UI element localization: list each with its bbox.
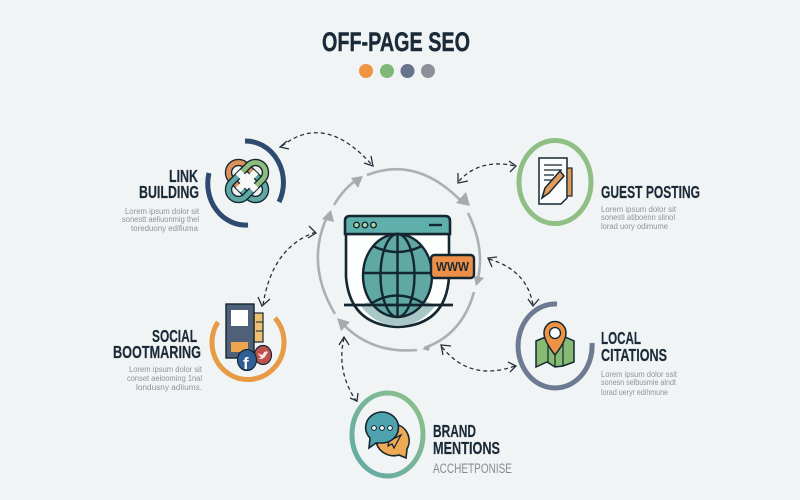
brand ring: [352, 393, 423, 476]
description: sonesti atiboenn slinol: [601, 213, 675, 222]
icon: bookmark device: [226, 304, 263, 358]
icon: orange speech bubble: [376, 424, 409, 458]
heading: GUEST POSTING: [601, 182, 700, 202]
icon: side pen: [567, 168, 572, 196]
pin hole: [550, 328, 560, 338]
window buttons: [354, 222, 376, 228]
icon: pencil: [542, 171, 564, 198]
heading: LOCAL: [601, 328, 641, 348]
central cycle ring: [318, 169, 484, 351]
description: Lorem ipsum dolor sit: [125, 207, 200, 216]
icon: document: [539, 158, 567, 204]
heading: [139, 166, 199, 202]
panel: link building: [122, 141, 283, 233]
dashed arrow: social to center: [258, 226, 316, 306]
window body: [346, 234, 449, 327]
description: sonestt aeliuonmig thel: [122, 215, 199, 224]
heading: BOOTMARING: [113, 342, 201, 362]
description: Lorem ipsum dolor sit: [601, 205, 677, 214]
title bar: [345, 216, 450, 234]
heading: BUILDING: [139, 182, 199, 202]
description: [122, 207, 200, 233]
heading: CITATIONS: [601, 345, 667, 365]
dashed arrow: guest posting to center: [458, 161, 516, 183]
icon: map: [536, 336, 574, 367]
heading: BRAND: [433, 421, 476, 441]
central icon: browser window with globe: [344, 216, 474, 327]
description: londusny adiiums.: [136, 383, 202, 392]
globe: [363, 234, 432, 317]
icon: star mark: [388, 435, 401, 448]
guest ring: [519, 140, 591, 224]
heading: SOCIAL: [152, 326, 197, 346]
description: conset aelooming 1nal: [127, 374, 202, 383]
description: [601, 205, 677, 231]
description: Lorem ipsum dolor ssit: [601, 370, 678, 379]
dashed arrow: center to local citations: [488, 257, 539, 306]
icon: facebook badge: [238, 350, 256, 373]
panel: social bookmarking: [113, 304, 284, 392]
heading: MENTIONS: [433, 438, 500, 458]
title dots: [359, 64, 435, 78]
icon: twitter badge: [254, 346, 272, 364]
title: OFF-PAGE SEO: [322, 27, 470, 57]
heading: [601, 328, 667, 365]
icon: facebook badge: f: [243, 354, 249, 373]
panel: local citations: [518, 304, 678, 397]
heading: LINK: [169, 166, 198, 186]
dashed arrow: center to local citations lower: [441, 345, 516, 372]
description: Lorem ipsum dolor sit: [129, 365, 203, 374]
bubble dots: [372, 426, 392, 430]
base line: [344, 304, 453, 306]
panel: brand mentions: [352, 393, 512, 476]
document lines: [544, 165, 562, 180]
social ring: [212, 318, 284, 379]
description: sonesn selbusmie alndt: [601, 378, 677, 387]
description: [127, 365, 203, 392]
icon: location pin: [544, 322, 566, 355]
heading: [433, 421, 500, 458]
description: lorad ueryr edihmune: [601, 388, 668, 397]
icon: chain link: [224, 158, 270, 204]
central icon: browser window with globe: WWW: [436, 260, 469, 274]
description: [601, 370, 678, 397]
heading: [113, 326, 201, 362]
map folds: [548, 336, 563, 367]
dashed arrow: center to brand mentions: [339, 337, 358, 402]
link ring: [208, 141, 283, 225]
www tag: [431, 255, 474, 278]
description: lorad uory odimume: [601, 222, 668, 231]
icon: teal speech bubble: [366, 412, 398, 448]
local ring: [518, 304, 592, 388]
panel: guest posting: [519, 140, 700, 231]
bowl shadow: [360, 298, 436, 326]
dashed arrow: link building to center: [280, 133, 373, 166]
description: toreduony edifiuma: [131, 224, 199, 233]
subtitle: ACCHETPONISE: [433, 461, 512, 476]
